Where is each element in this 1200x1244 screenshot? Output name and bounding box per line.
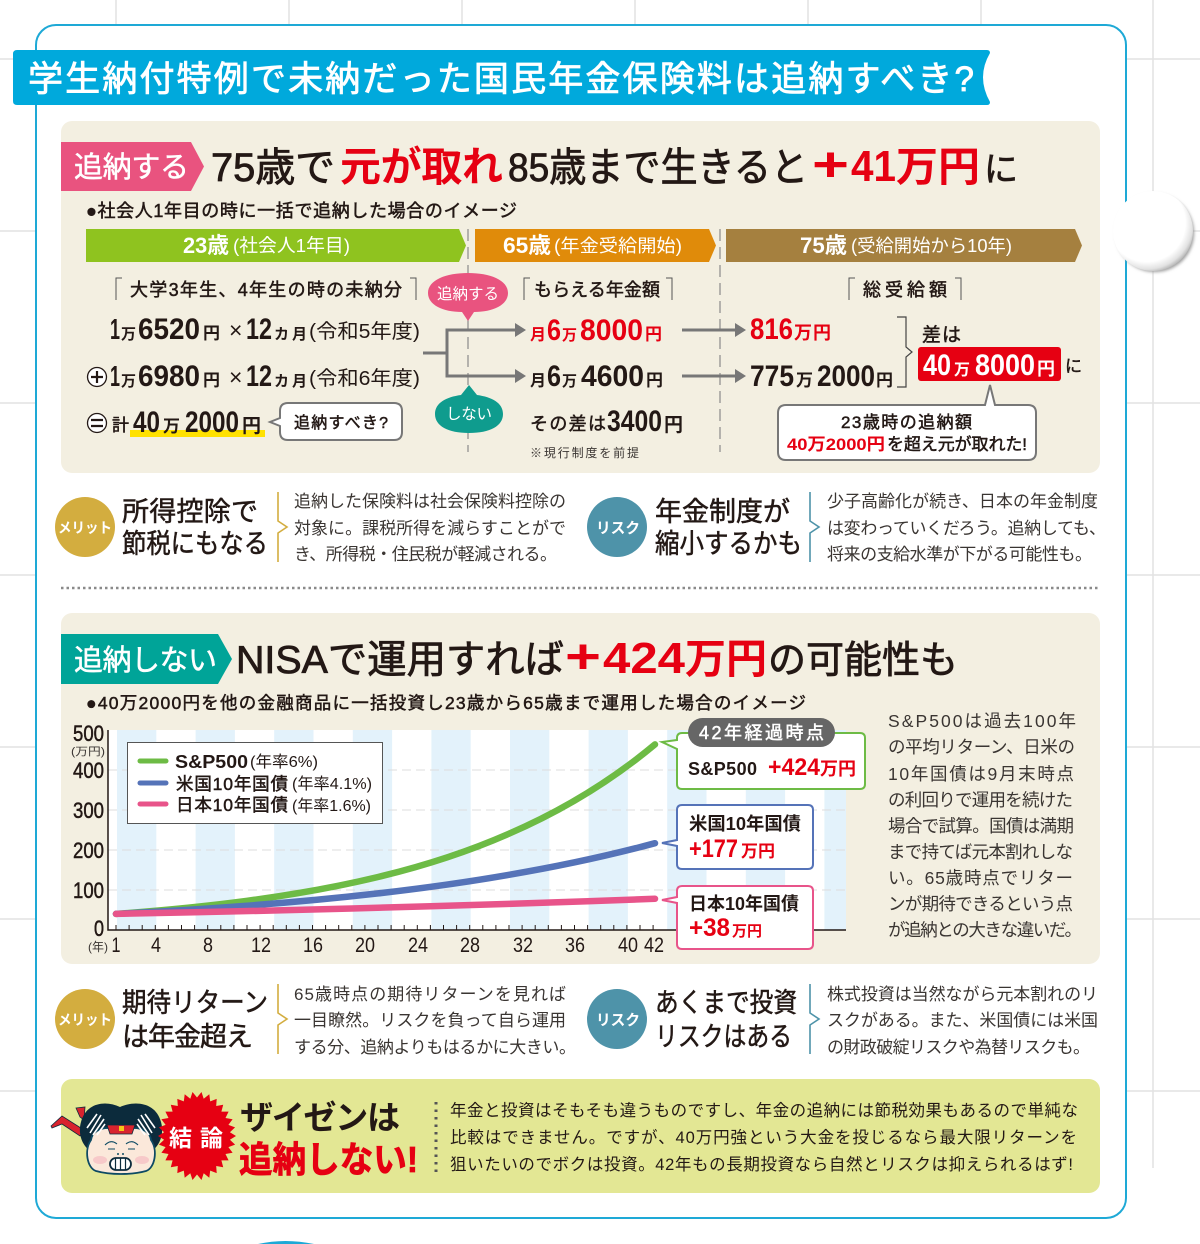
- y axis labels: 0: [94, 916, 104, 941]
- callout: S&P500: [662, 733, 865, 789]
- panel: pay back: [61, 121, 1100, 473]
- total: 775万2000円: 2000: [817, 360, 875, 393]
- tag: 追納しない: 追納しない: [74, 644, 217, 677]
- heading: 元が取れ: [340, 144, 503, 190]
- callout: recovered: を超え元が取れた!: [887, 435, 1027, 454]
- bubble: 追納する: [428, 273, 508, 321]
- heading: +: [565, 631, 601, 684]
- difference: 円: [664, 415, 683, 436]
- heading: 万円: [685, 636, 767, 682]
- side note: 10年国債は9月末時点: [888, 764, 1074, 784]
- total: 775万2000円: [750, 360, 893, 393]
- tag: 追納する: [61, 142, 204, 191]
- total: 775万2000円: 万: [796, 371, 813, 390]
- header: pension: もらえる年金額: [534, 280, 660, 300]
- legend: 日本10年国債: [176, 795, 288, 815]
- y axis labels: [71, 721, 105, 941]
- bubble: しない: [435, 385, 503, 433]
- heading: 424: [603, 634, 686, 683]
- x axis labels: 20: [355, 934, 375, 957]
- amount: 6万4600: 月: [530, 373, 546, 390]
- merit: tax: 所得控除で: [122, 497, 258, 527]
- total: 816万円: [750, 313, 831, 346]
- risk: investment: [587, 984, 1098, 1057]
- merit: tax: 追納した保険料は社会保険料控除の: [294, 492, 566, 511]
- side note: の平均リターン、日米の: [888, 737, 1075, 757]
- row: 令和6年度: カ月: [274, 373, 307, 390]
- amount: 6万8000: 円: [645, 325, 662, 344]
- conclusion text: 狙いたいのでボクは投資。42年もの長期投資なら自然とリスクは抑えられるはず!: [450, 1155, 1073, 1174]
- legend: (年率1.6%): [292, 797, 371, 815]
- risk: pension shrink: 将来の支給水準が下がる可能性も。: [827, 545, 1092, 564]
- row: 令和5年度: 1: [110, 314, 120, 346]
- icon: pin circle: [1113, 191, 1194, 272]
- side note: まで持てば元本割れしな: [888, 842, 1073, 862]
- row: 令和5年度: [110, 313, 420, 346]
- callout: Japan bond: 日本10年国債: [689, 893, 799, 914]
- difference result: 万: [954, 362, 970, 379]
- side note: の利回りで運用を続けた: [888, 790, 1073, 810]
- callout: recovered: 23歳時の追納額: [841, 413, 972, 432]
- x axis labels: 1: [112, 934, 120, 957]
- amount: 6万8000: 月: [530, 327, 546, 344]
- row: total: 円: [242, 416, 261, 437]
- x axis labels: 28: [460, 934, 480, 957]
- total: 816万円: 万円: [794, 323, 831, 343]
- heading: 75歳で: [211, 146, 335, 190]
- conclusion heading: ザイゼンは: [240, 1099, 400, 1136]
- merit: return: 一目瞭然。リスクを負って自ら運用: [294, 1011, 566, 1030]
- branch arrows: [423, 323, 526, 383]
- tag: 追納しない: [61, 634, 232, 684]
- callout: US bond: 米国10年国債: [689, 813, 801, 834]
- x axis labels: [88, 934, 664, 957]
- side note: 場合で試算。国債は満期: [888, 816, 1074, 836]
- x axis labels: 24: [408, 934, 428, 957]
- heading: [236, 631, 958, 684]
- conclusion heading: 追納しない!: [239, 1139, 418, 1180]
- callout: US bond: 万円: [741, 842, 775, 861]
- timeline arrow: 23歳: (社会人1年目): [233, 235, 350, 256]
- merit: return: メリット: [58, 1013, 112, 1029]
- amount: 6万8000: [530, 314, 662, 347]
- heading: +: [812, 139, 849, 192]
- line chart: [71, 721, 846, 957]
- row: 令和5年度: 万: [121, 326, 136, 343]
- side note: い。65歳時点でリター: [888, 868, 1073, 888]
- risk: investment: の財政破綻リスクや為替リスクも。: [827, 1038, 1090, 1057]
- conclusion text: 年金と投資はそもそも違うものですし、年金の追納には節税効果もあるので単純な: [450, 1101, 1078, 1120]
- callout: US bond: [662, 805, 813, 869]
- merit: return: 期待リターン: [122, 988, 268, 1018]
- heading: [211, 139, 1018, 192]
- row: 令和6年度: 12: [246, 360, 272, 393]
- timeline arrow: 65歳: 65歳: [503, 233, 551, 258]
- legend: 米国10年国債: [176, 774, 288, 794]
- amount: 6万4600: 円: [646, 371, 663, 390]
- y axis labels: 500: [73, 721, 104, 746]
- callout: should pay: 追納すべき?: [294, 414, 388, 432]
- x axis labels: 16: [303, 934, 323, 957]
- tag: 追納する: 追納する: [74, 151, 189, 184]
- row: 令和6年度: 万: [121, 373, 136, 390]
- amount: 6万4600: 6: [547, 360, 561, 393]
- panel: conclusion: [51, 1079, 1100, 1193]
- legend: (年率4.1%): [292, 775, 372, 793]
- row: total: 計: [112, 416, 129, 435]
- x axis labels: 32: [513, 934, 533, 957]
- heading: 41: [851, 142, 896, 191]
- subheading: ●40万2000円を他の金融商品に一括投資し23歳から65歳まで運用した場合のイメージ: [86, 693, 806, 713]
- callout: recovered: [778, 385, 1036, 460]
- callout: US bond: +177: [689, 835, 738, 863]
- subheading: ●社会人1年目の時に一括で追納した場合のイメージ: [86, 201, 517, 221]
- arrows to total: [682, 323, 746, 383]
- merit: return: 65歳時点の期待リターンを見れば: [294, 985, 566, 1004]
- legend: (年率6%): [250, 753, 318, 771]
- header: total: [849, 278, 961, 300]
- risk: investment: リスク: [596, 1012, 640, 1029]
- merit: tax: メリット: [58, 521, 112, 537]
- row: total: 万: [163, 417, 180, 436]
- side note: S&P500は過去100年: [888, 711, 1076, 731]
- heading: 85歳まで生きると: [508, 146, 808, 190]
- legend: S&P500: [175, 752, 248, 772]
- difference: [530, 405, 683, 438]
- header: unpaid: 大学3年生、4年生の時の未納分: [130, 280, 402, 300]
- risk: pension shrink: 少子高齢化が続き、日本の年金制度: [827, 492, 1098, 511]
- difference result: 差は: [922, 324, 961, 346]
- legend: [128, 742, 382, 824]
- merit: tax: [55, 492, 566, 564]
- heading: NISAで運用すれば: [236, 639, 564, 682]
- timeline arrow: 65歳: (年金受給開始): [554, 236, 682, 256]
- timeline arrow: 75歳: 75歳: [800, 233, 847, 258]
- y axis labels: 200: [73, 838, 104, 863]
- heading: 万円: [896, 144, 980, 190]
- callout: S&P500: 万円: [820, 759, 856, 779]
- callout: recovered: 40万2000円: [787, 435, 885, 454]
- side note: が追納との大きな違いだ。: [888, 920, 1082, 940]
- total: 775万2000円: 円: [876, 371, 893, 390]
- risk: pension shrink: [587, 492, 1106, 564]
- row: 令和6年度: 円: [203, 371, 220, 390]
- side note: ンが期待できるという点: [888, 894, 1073, 914]
- conclusion text: 比較はできません。ですが、40万円強という大金を投じるなら最大限リターンを: [450, 1128, 1077, 1147]
- x axis labels: 4: [151, 934, 161, 957]
- panel: do not pay back: [61, 613, 1100, 964]
- row: 令和5年度: 6520: [138, 313, 200, 346]
- row: 令和6年度: 6980: [138, 360, 200, 393]
- conclusion text: [450, 1101, 1078, 1174]
- amount: 6万8000: 万: [562, 327, 577, 344]
- callout: Japan bond: [662, 886, 813, 949]
- difference result: に: [1065, 357, 1082, 376]
- pill: 42 years: 42年経過時点: [699, 723, 824, 743]
- risk: pension shrink: リスク: [596, 520, 640, 537]
- row: total: 2000: [185, 406, 239, 439]
- amount: 6万4600: [530, 360, 663, 393]
- conclusion heading: [239, 1099, 418, 1180]
- risk: investment: あくまで投資: [655, 988, 797, 1018]
- amount: 6万4600: 万: [562, 373, 577, 390]
- row: 令和5年度: 円: [203, 324, 220, 343]
- y axis labels: (万円): [71, 746, 105, 758]
- series: US bond: [116, 843, 655, 914]
- risk: pension shrink: は変わっていくだろう。追納しても、: [827, 519, 1106, 538]
- callout: Japan bond: +38: [689, 914, 730, 942]
- timeline arrow: 75歳: (受給開始から10年): [851, 236, 1012, 256]
- row: total: [112, 406, 265, 439]
- timeline arrow: 75歳: [726, 229, 1082, 262]
- bubble: 追納する: 追納する: [437, 285, 499, 303]
- risk: pension shrink: 縮小するかも: [655, 529, 802, 559]
- callout: should pay: [270, 403, 402, 440]
- merit: return: [55, 984, 576, 1057]
- difference: 3400: [607, 405, 662, 438]
- y axis labels: 400: [73, 758, 104, 783]
- y axis labels: 300: [73, 798, 104, 823]
- axes: [108, 730, 846, 930]
- callout: S&P500: +424: [768, 754, 821, 781]
- title banner: 学生納付特例で未納だった国民年金保険料は追納すべき?: [28, 60, 974, 99]
- merit: tax: き、所得税・住民税が軽減される。: [294, 545, 557, 564]
- row: 令和5年度: カ月: [274, 326, 307, 343]
- x axis labels: 42: [644, 934, 664, 957]
- difference result: 40: [923, 349, 951, 382]
- bubble: しない: しない: [446, 405, 492, 423]
- row: total: 40: [133, 406, 160, 439]
- heading: の可能性も: [768, 640, 958, 682]
- x axis labels: 36: [565, 934, 585, 957]
- risk: investment: リスクはある: [655, 1022, 792, 1052]
- icon: mascot: [51, 1104, 162, 1174]
- icon: equals: [88, 414, 106, 432]
- x axis labels: 12: [251, 934, 271, 957]
- badge: conclusion: 結: [169, 1125, 192, 1151]
- badge: conclusion: 論: [200, 1125, 223, 1151]
- row: 令和5年度: (令和5年度): [309, 320, 420, 343]
- difference: その差は: [530, 414, 606, 434]
- callout: S&P500: S&P500: [688, 759, 757, 779]
- x axis labels: 40: [618, 934, 638, 957]
- timeline arrow: 23歳: 23歳: [183, 233, 229, 258]
- merit: return: する分、追納よりもはるかに大きい。: [294, 1038, 576, 1057]
- risk: investment: 株式投資は当然ながら元本割れのリ: [827, 985, 1098, 1004]
- pill: 42 years: [688, 718, 835, 747]
- icon: plus: [88, 368, 106, 386]
- amount: 6万4600: 4600: [581, 360, 644, 393]
- row: 令和6年度: [110, 360, 420, 393]
- bottom blue arc: [258, 1241, 314, 1244]
- title banner: [13, 50, 990, 105]
- risk: pension shrink: 年金制度が: [655, 497, 790, 527]
- merit: tax: 節税にもなる: [122, 529, 268, 559]
- timeline arrow: 65歳: [475, 229, 716, 262]
- difference result: 8000: [975, 349, 1035, 382]
- amount: 6万8000: 8000: [580, 314, 643, 347]
- series: Japan bond: [116, 899, 655, 914]
- row: 令和5年度: 12: [246, 313, 272, 346]
- x axis labels: (年): [88, 940, 108, 954]
- callout: Japan bond: 万円: [732, 923, 762, 940]
- difference result: [918, 324, 1082, 382]
- plot background: [108, 730, 846, 930]
- merit: return: は年金超え: [122, 1022, 253, 1052]
- total: 775万2000円: 775: [750, 360, 794, 393]
- amount: 6万8000: 6: [547, 314, 561, 347]
- total: 816万円: 816: [750, 313, 793, 346]
- y axis labels: 100: [73, 878, 104, 903]
- row: 令和6年度: 1: [110, 361, 120, 393]
- merit: tax: 対象に。課税所得を減らすことがで: [294, 519, 566, 538]
- header: total: 総受給額: [863, 280, 947, 300]
- row: 令和5年度: ×: [229, 317, 242, 343]
- timeline arrow: 23歳: [86, 229, 466, 262]
- row: 令和6年度: (令和6年度): [309, 367, 420, 390]
- side note: [888, 711, 1082, 940]
- risk: investment: スクがある。また、米国債には米国: [827, 1011, 1098, 1030]
- series: S&P500: [116, 744, 655, 914]
- brace: [897, 317, 912, 387]
- badge: conclusion: [158, 1092, 236, 1180]
- note: ※現行制度を前提: [530, 445, 639, 460]
- heading: に: [984, 151, 1018, 189]
- difference result: 円: [1037, 359, 1055, 379]
- x axis labels: 8: [203, 934, 213, 957]
- row: 令和6年度: ×: [229, 364, 242, 390]
